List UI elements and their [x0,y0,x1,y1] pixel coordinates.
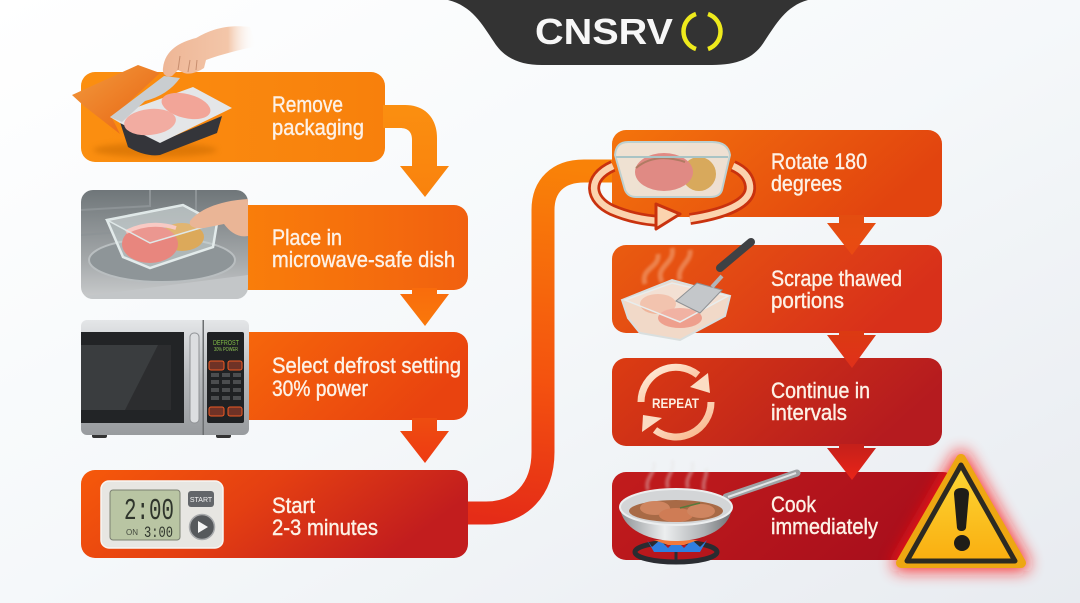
label [272,92,364,140]
icon: digital timer: START [190,497,213,504]
icon: dish with spatula and steam [622,242,751,340]
label: Select defrost setting [272,353,461,378]
step 3 panel [81,320,468,438]
step 4 panel [81,470,468,558]
label: Continue in [771,378,870,403]
hand [163,26,256,77]
icon: digital timer [101,481,223,548]
step 5 panel [594,130,942,229]
connector: step 4 to step 5 [460,171,625,513]
arrow: step 3 to 4 [400,418,449,463]
arrow: step 5 to 6 [827,215,876,255]
label: 30% power [272,376,368,401]
arrow: step 6 to 7 [827,331,876,368]
label [272,353,461,401]
icon: digital timer: ON [126,528,138,537]
photo: dish in microwave [81,190,248,299]
label: microwave-safe dish [272,247,455,272]
hand [190,199,248,236]
label: Start [272,493,316,518]
label [771,378,870,425]
logo brackets [684,14,720,49]
label: Remove [272,92,343,117]
arrow: step 7 to 8 [827,444,876,480]
logo banner [448,0,808,65]
label: degrees [771,171,842,196]
icon: digital timer: 3:00 [144,524,173,542]
logo wordmark: CNSRV [535,11,673,52]
label: Scrape thawed [771,266,902,291]
step 7 panel [612,358,942,446]
step 2 panel [81,190,468,299]
label: packaging [272,115,364,140]
label: immediately [771,514,879,539]
icon: microwave [81,320,249,438]
label [771,266,902,313]
label: 2-3 minutes [272,515,378,540]
icon: dish with rotation arrows [594,142,750,229]
label: Cook [771,492,817,517]
label: intervals [771,400,847,425]
label: Place in [272,225,342,250]
label [272,225,455,272]
label: Rotate 180 [771,149,867,174]
display text: DEFROST [213,338,239,347]
label [272,493,378,540]
label [771,149,867,196]
icon: repeat cycle [641,367,711,437]
icon: warning triangle [900,458,1022,564]
icon: frying pan on burner [620,460,797,563]
label: portions [771,288,844,313]
step 6 panel [612,242,942,340]
step 1 panel [72,26,385,162]
label [771,492,879,539]
icon: digital timer: 2:00 [124,494,174,529]
arrow: step 1 to 2 [383,105,449,197]
arrow: step 2 to 3 [400,288,449,326]
step 8 panel [612,460,957,563]
icon: microwave: 30% POWER [214,347,238,353]
icon: opening food tray [72,26,256,157]
icon: repeat cycle: REPEAT [652,395,699,411]
